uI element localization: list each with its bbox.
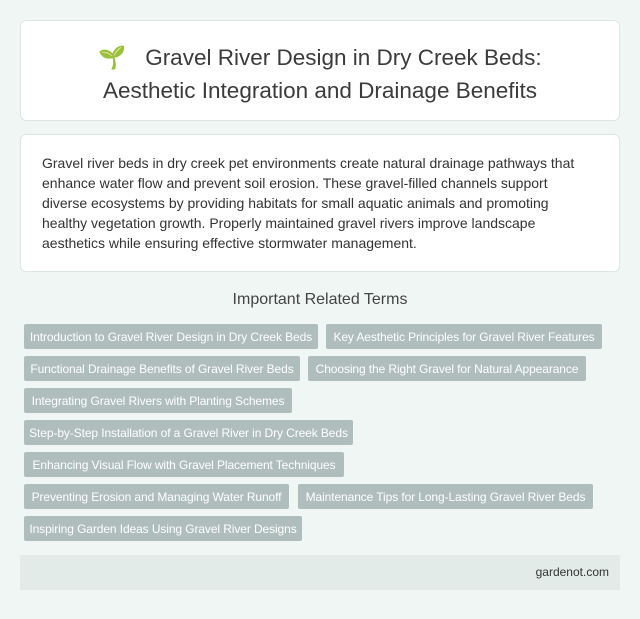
heading: related terms: Important Related Terms: [233, 291, 407, 308]
tags: Enhancing Visual Flow with Gravel Placement Techniques: [32, 458, 336, 472]
tags: Key Aesthetic Principles for Gravel River Features: [333, 330, 595, 344]
tags: Introduction to Gravel River Design in Dry Creek Beds: [30, 330, 312, 344]
title: Aesthetic Integration and Drainage Benefits: [103, 78, 537, 103]
tags: Choosing the Right Gravel for Natural Appearance: [316, 362, 578, 376]
tags: Integrating Gravel Rivers with Planting Schemes: [32, 394, 284, 408]
title card: [20, 20, 620, 121]
tags: Inspiring Garden Ideas Using Gravel River Designs: [29, 522, 297, 536]
tags: Maintenance Tips for Long-Lasting Gravel River Beds: [306, 490, 585, 504]
footer credit: gardenot.com: [536, 565, 609, 579]
footer: [20, 555, 620, 590]
title: [98, 45, 542, 103]
description text: Gravel river beds in dry creek pet environments create natural drainage pathways that enhance water flow and prevent soil erosion. These gravel-filled channels support diverse ecosystems by providing habitats for small aquatic animals and promoting healthy vegetation growth. Properly maintained gravel rivers improve landscape aesthetics while ensuring effective stormwater management.: [42, 155, 574, 251]
tags: Step-by-Step Installation of a Gravel River in Dry Creek Beds: [29, 426, 348, 440]
description card: [20, 134, 620, 272]
tags: Preventing Erosion and Managing Water Runoff: [32, 490, 281, 504]
tags: Functional Drainage Benefits of Gravel River Beds: [30, 362, 294, 376]
title: 🌱 Gravel River Design in Dry Creek Beds:: [98, 45, 542, 70]
